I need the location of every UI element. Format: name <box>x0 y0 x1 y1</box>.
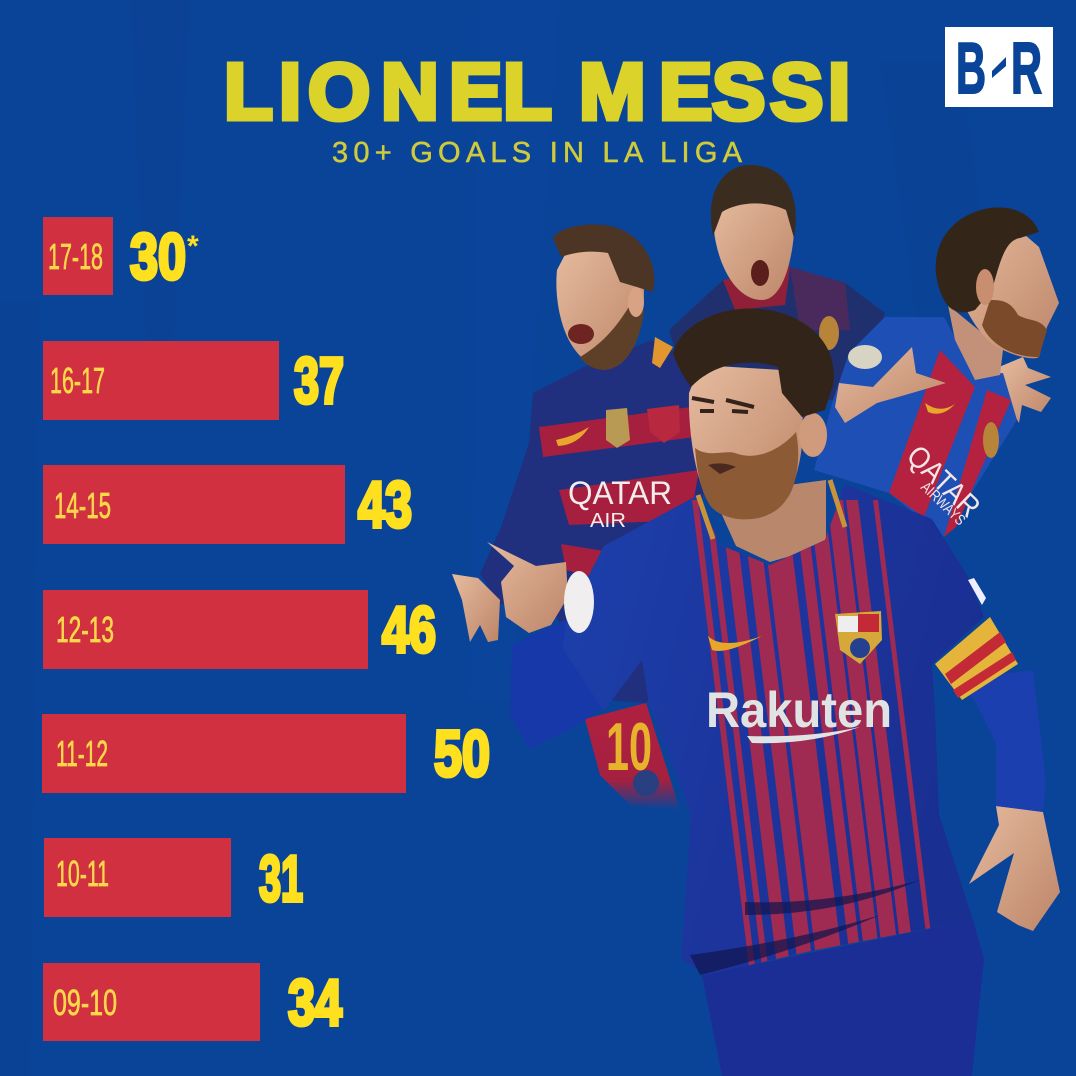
photo: player, back left <box>452 224 705 810</box>
bar 16-17: 16-17 <box>50 360 105 401</box>
bar 09-10: 09-10 <box>53 982 117 1023</box>
bar 17-18: 17-18 <box>48 236 103 277</box>
hair <box>673 308 834 417</box>
Nike swoosh <box>708 636 762 651</box>
jersey stripes <box>692 500 936 975</box>
bar 16-17: 37 <box>294 344 344 417</box>
beard <box>695 432 798 519</box>
bar 11-12 <box>42 714 490 793</box>
captain armband <box>935 617 1018 700</box>
photo: player, back right: AIRWAYS <box>917 479 969 529</box>
photo: player, top back <box>669 165 885 400</box>
jersey folds <box>690 880 920 975</box>
ear <box>799 413 827 457</box>
bar 12-13 <box>43 590 436 669</box>
bar 12-13: 46 <box>382 593 436 666</box>
logo: Bleacher Report B/R <box>945 27 1053 109</box>
sleeve sponsor <box>968 578 986 605</box>
photo: player, main front <box>487 308 1060 1076</box>
logo: Bleacher Report B/R: R <box>1011 29 1042 109</box>
bar 10-11: 31 <box>259 842 303 915</box>
bar 17-18: * <box>187 230 199 263</box>
La Liga patch <box>564 571 594 633</box>
head <box>689 365 803 519</box>
bar 11-12: 11-12 <box>56 733 108 774</box>
left long sleeve <box>510 620 610 749</box>
photo: player, back right <box>814 207 1059 537</box>
photo: player, back left: AIR <box>590 510 626 532</box>
neck <box>713 480 826 562</box>
bar 16-17 <box>43 341 344 420</box>
shorts <box>702 920 984 1076</box>
subtitle: 30+ GOALS IN LA LIGA <box>332 137 743 169</box>
bar 10-11 <box>44 838 303 917</box>
right long sleeve <box>960 670 1046 812</box>
sponsor: Rakuten <box>706 682 892 738</box>
eyes and brows <box>692 398 754 412</box>
jersey body <box>563 484 984 975</box>
bar 14-15: 43 <box>358 468 412 541</box>
photo: player, back right: QATAR <box>900 439 986 524</box>
photo: player, back left: 10 <box>606 709 652 785</box>
bar 14-15: 14-15 <box>54 485 111 526</box>
bar chart: goals per season <box>42 217 490 1041</box>
bar 17-18 <box>43 217 199 295</box>
bar 09-10: 34 <box>288 966 342 1039</box>
bar 12-13: 12-13 <box>56 609 114 650</box>
photo: player, back left: QATAR <box>568 475 672 511</box>
bar 17-18: 30 <box>130 220 186 293</box>
bar 11-12: 50 <box>434 717 490 790</box>
bar 09-10 <box>43 963 342 1041</box>
logo: Bleacher Report B/R: B <box>956 29 986 109</box>
title: LIONEL MESSI <box>224 47 850 136</box>
hand pointing <box>487 542 568 633</box>
collar <box>698 480 845 539</box>
right forearm and hand <box>969 806 1060 931</box>
Barcelona crest <box>835 611 882 664</box>
bar 14-15 <box>43 465 412 544</box>
bar 10-11: 10-11 <box>56 853 109 894</box>
